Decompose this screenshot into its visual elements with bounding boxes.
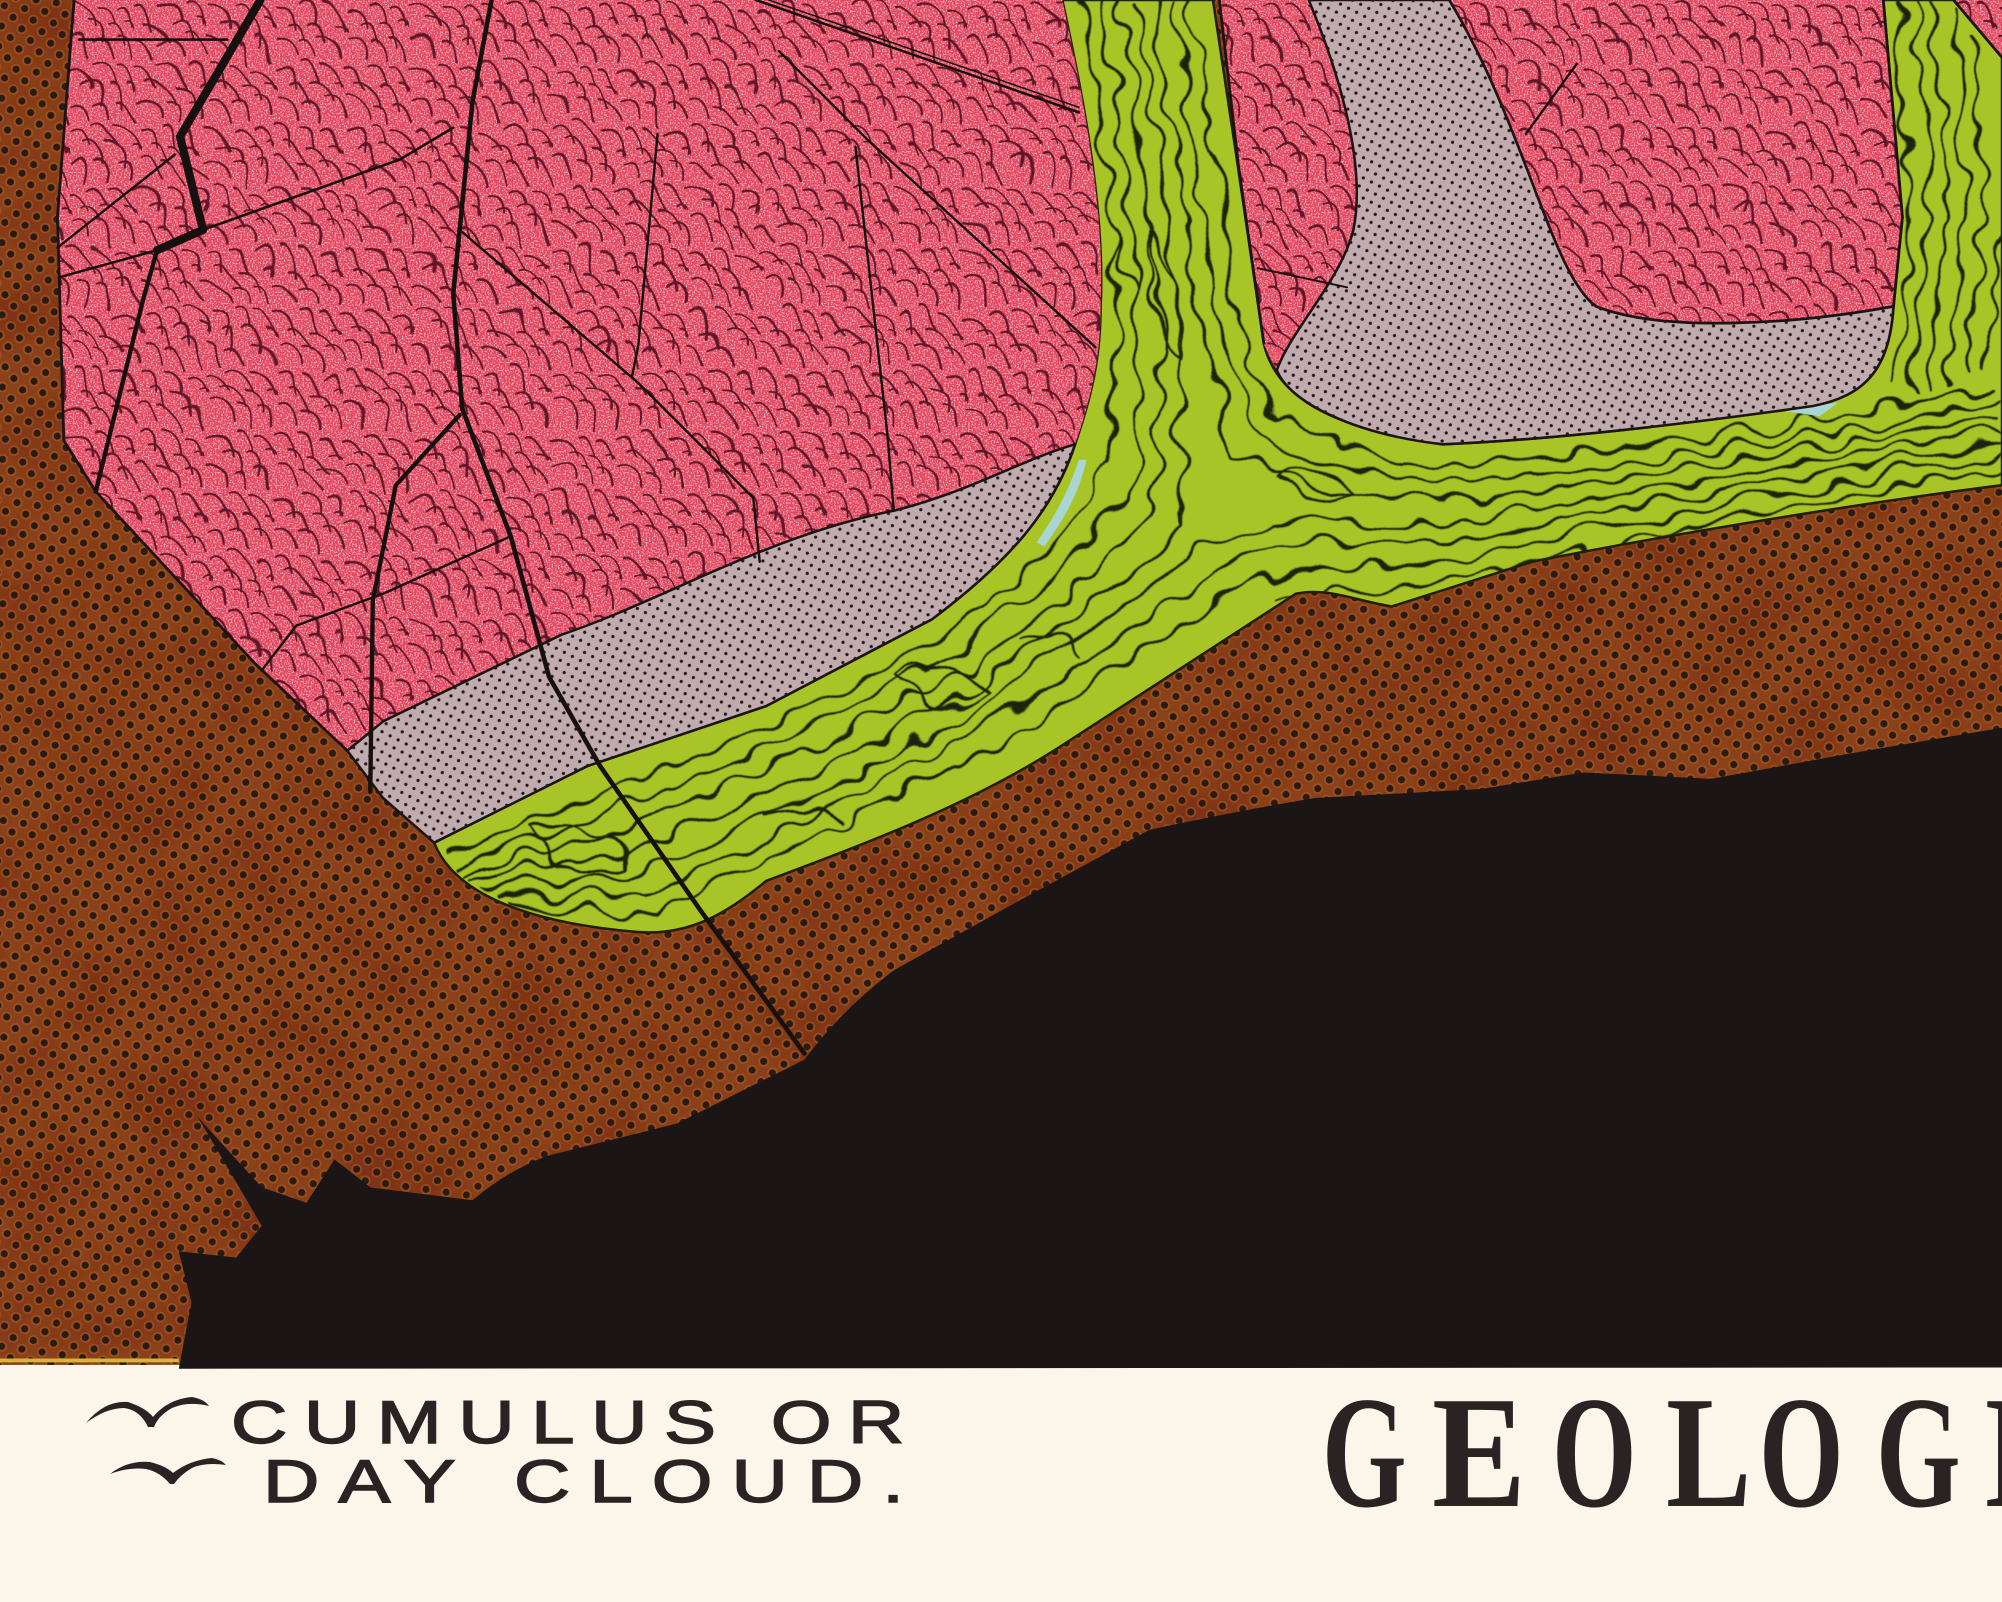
grey stippled stratum lower left [347, 444, 1075, 843]
title: O [1759, 1363, 1844, 1541]
icon: cumulus cloud symbol upper [86, 1397, 209, 1427]
icon: cumulus cloud symbol lower [110, 1458, 226, 1484]
legend label: cumulus or day cloud [231, 1389, 904, 1515]
grey stippled stratum upper right [1277, 0, 1893, 444]
title: O [1552, 1363, 1637, 1541]
title: E [1432, 1364, 1526, 1541]
title: G [1322, 1363, 1407, 1541]
title: L [1666, 1365, 1751, 1541]
black basal mass [179, 728, 2002, 1369]
title: G [1876, 1363, 1961, 1541]
legend label: cumulus or day cloud: DAY CLOUD. [263, 1448, 904, 1515]
title [1322, 1363, 2002, 1541]
fault lines and cracks [57, 0, 1577, 1053]
grey stipple dots upper right [1277, 0, 1893, 444]
pink scaled granite masses [0, 0, 2002, 779]
legend label: cumulus or day cloud: CUMULUS OR [231, 1389, 904, 1456]
grey stipple dots lower left [347, 444, 1075, 843]
green contorted stratum [434, 0, 2002, 932]
